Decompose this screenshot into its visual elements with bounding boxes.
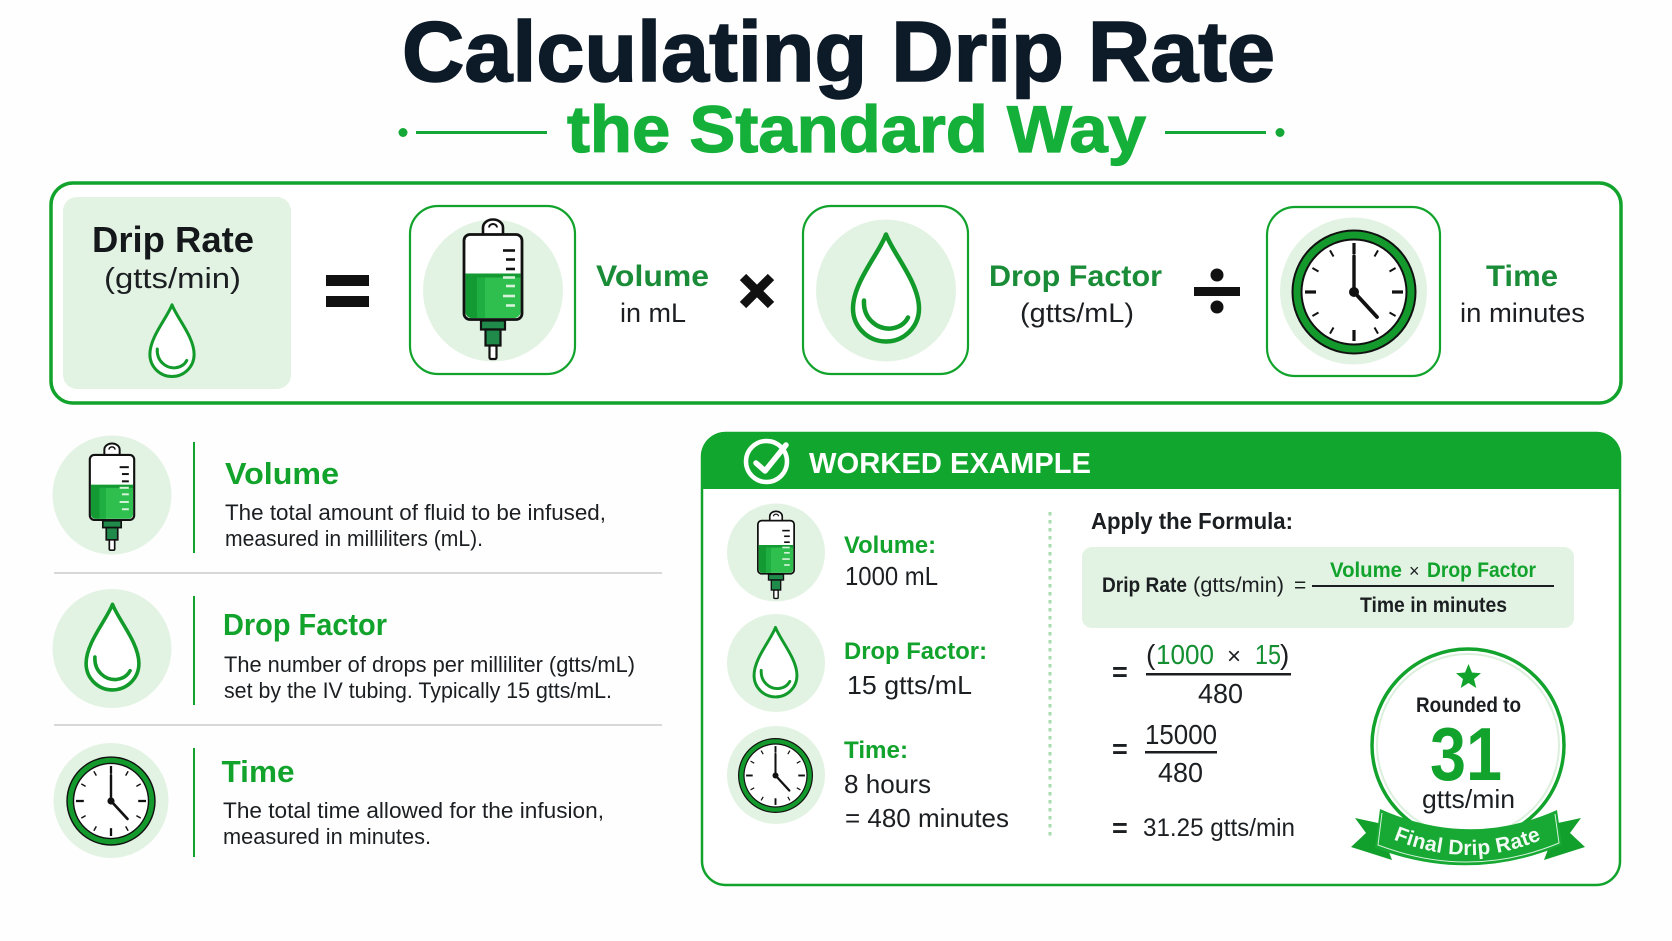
label: drop factor [989, 260, 1162, 328]
panel: formula [51, 183, 1621, 403]
given: drop factor: 15 gtts/mL [847, 670, 972, 700]
calculation step 1: 1000 [1156, 639, 1214, 670]
calculation step 2: 15000 [1145, 719, 1217, 750]
ribbon: final drip rate: Final Drip Rate [1394, 826, 1540, 860]
operator: times [743, 277, 771, 305]
calculation step 1: 15 [1255, 639, 1281, 670]
formula box: = [1294, 574, 1306, 597]
calculation step 3: 31.25 gtts/min [1143, 814, 1295, 842]
badge: rounded result [1351, 647, 1585, 866]
definition: volume: The total amount of fluid to be infused, [225, 500, 606, 525]
definition: volume [52, 436, 606, 554]
calculation step 1 [1112, 639, 1291, 709]
icon: drop [803, 206, 968, 374]
given: volume [727, 504, 938, 602]
calculation step 1: ( [1146, 639, 1156, 670]
calculation step 1: = [1112, 657, 1128, 687]
given: time: Time: [844, 737, 908, 764]
label: drop factor: (gtts/mL) [1020, 298, 1134, 328]
drip rate block [63, 197, 291, 389]
definition: drop factor: The number of drops per milliliter (gtts/mL) [224, 652, 635, 677]
operator: equals [326, 275, 369, 307]
panel: definitions [52, 436, 662, 858]
definition: drop factor: set by the IV tubing. Typically 15 gtts/mL. [224, 678, 612, 703]
formula box: Time in minutes [1360, 594, 1507, 617]
drip rate block: (gtts/min) [104, 263, 241, 295]
given: drop factor: Drop Factor: [844, 638, 987, 665]
icon: IV bag [410, 206, 575, 374]
definition: volume: measured in milliliters (mL). [225, 526, 483, 551]
icon: check badge [746, 441, 787, 482]
label: drop factor: Drop Factor [989, 260, 1162, 293]
calculation step 1: × [1227, 643, 1241, 670]
given: time [727, 726, 1009, 833]
label: time: in minutes [1460, 298, 1585, 328]
header bar [701, 432, 1621, 489]
calculation step 1: 480 [1198, 678, 1243, 709]
badge: rounded result: gtts/min [1422, 784, 1515, 814]
given: drop factor [727, 614, 987, 712]
definition: time: measured in minutes. [223, 824, 431, 849]
calculation step 2 [1112, 719, 1217, 788]
label: volume: in mL [620, 298, 686, 328]
subtitle: the Standard Way [567, 92, 1146, 166]
given: time: 8 hours [844, 769, 931, 799]
panel: worked example [700, 432, 1622, 886]
definition: time [54, 743, 604, 858]
definition: drop factor [52, 589, 635, 708]
calculation step 1: ) [1280, 639, 1289, 670]
label: time [1460, 260, 1585, 328]
heading: apply the formula: Apply the Formula: [1091, 508, 1293, 534]
title: Calculating Drip Rate [402, 5, 1275, 100]
subtitle flourish: left [398, 128, 547, 137]
icon: star [1456, 664, 1481, 688]
label: time: Time [1486, 260, 1558, 293]
operator: divide [1194, 268, 1240, 314]
label: volume [596, 260, 709, 328]
formula box: Drop Factor [1427, 559, 1536, 582]
header text: WORKED EXAMPLE [809, 448, 1091, 480]
given: volume: 1000 mL [845, 561, 938, 591]
icon: clock [1267, 207, 1440, 376]
given: volume: Volume: [844, 532, 936, 559]
badge: rounded result: 31 [1430, 712, 1502, 796]
formula box [1082, 547, 1574, 628]
label: volume: Volume [596, 260, 709, 293]
badge: rounded result: Rounded to [1416, 694, 1521, 717]
calculation step 3: = [1112, 813, 1128, 843]
given: time: = 480 minutes [845, 803, 1009, 833]
definition: time: Time [222, 754, 294, 789]
formula box: Volume [1330, 559, 1402, 582]
definition: drop factor: Drop Factor [223, 607, 387, 642]
definition: time: The total time allowed for the infusion, [223, 798, 604, 823]
formula box: (gtts/min) [1193, 574, 1284, 597]
subtitle flourish: right [1165, 128, 1284, 137]
calculation step 2: = [1112, 734, 1128, 764]
calculation step 2: 480 [1158, 757, 1203, 788]
formula box: Drip Rate [1102, 574, 1187, 597]
definition: volume: Volume [225, 456, 339, 491]
formula box: × [1409, 561, 1420, 581]
ribbon: final drip rate [1351, 809, 1585, 866]
drip rate block: Drip Rate [92, 219, 254, 260]
